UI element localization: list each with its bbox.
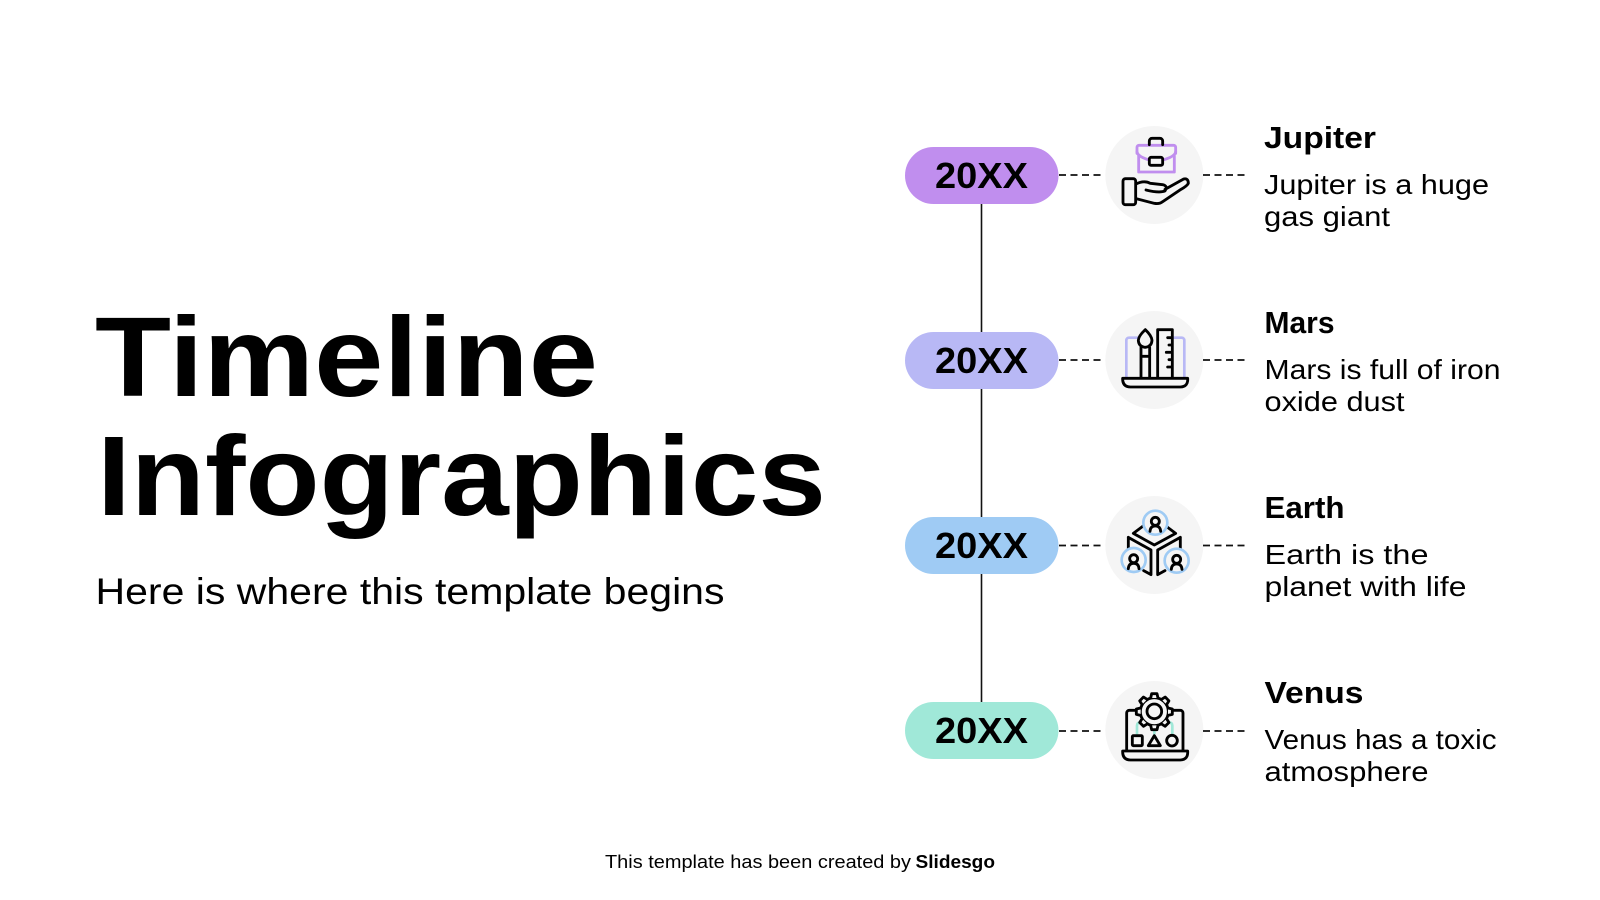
dashed connector left: [1059, 174, 1101, 176]
icon: paintbrush and ruler: [1105, 311, 1203, 409]
label: Jupiter: gas giant: [1264, 201, 1390, 232]
label: Jupiter: Jupiter: [1264, 120, 1376, 155]
dashed connector right: [1203, 174, 1245, 176]
dashed connector right: [1203, 359, 1245, 361]
label: Venus: Venus: [1264, 675, 1364, 710]
label: Mars: Mars is full of iron: [1264, 354, 1500, 385]
icon: team cube: [1105, 496, 1203, 594]
footer credit: This template has been created by: [605, 851, 912, 872]
title: [95, 294, 826, 539]
label: Venus: [1264, 675, 1497, 787]
label: Venus: atmosphere: [1264, 756, 1428, 787]
year pill: periwinkle: [905, 332, 1058, 389]
label: Venus: Venus has a toxic: [1264, 724, 1497, 755]
year pill: periwinkle: 20XX: [935, 340, 1028, 381]
title: Infographics: [97, 413, 826, 539]
timeline row: Jupiter: [905, 120, 1489, 232]
year pill: mint: 20XX: [935, 710, 1028, 751]
label: Mars: Mars: [1264, 305, 1334, 340]
dashed connector left: [1059, 359, 1101, 361]
dashed connector right: [1203, 730, 1245, 732]
year pill: mint: [905, 702, 1058, 759]
dashed connector right: [1203, 544, 1245, 546]
label: Earth: Earth: [1264, 490, 1344, 525]
timeline row: Earth: [905, 490, 1466, 602]
label: Mars: [1264, 305, 1500, 417]
label: Earth: planet with life: [1264, 571, 1466, 602]
timeline row: Mars: [905, 305, 1500, 417]
footer credit: Slidesgo: [916, 851, 995, 872]
label: Earth: [1264, 490, 1466, 602]
label: Earth: Earth is the: [1264, 539, 1428, 570]
dashed connector left: [1059, 544, 1101, 546]
year pill: blue: [905, 517, 1058, 574]
title: Timeline: [95, 294, 598, 420]
subtitle: Here is where this template begins: [96, 571, 724, 612]
timeline row: Venus: [905, 675, 1497, 787]
icon: hand holding briefcase: [1105, 126, 1203, 224]
year pill: blue: 20XX: [935, 525, 1028, 566]
label: Jupiter: Jupiter is a huge: [1264, 169, 1489, 200]
year pill: purple: 20XX: [935, 155, 1028, 196]
label: Jupiter: [1264, 120, 1489, 232]
timeline vertical connector: [980, 200, 982, 705]
dashed connector left: [1059, 730, 1101, 732]
year pill: purple: [905, 147, 1058, 204]
icon: laptop with gear and shapes: [1105, 681, 1203, 779]
label: Mars: oxide dust: [1264, 386, 1405, 417]
